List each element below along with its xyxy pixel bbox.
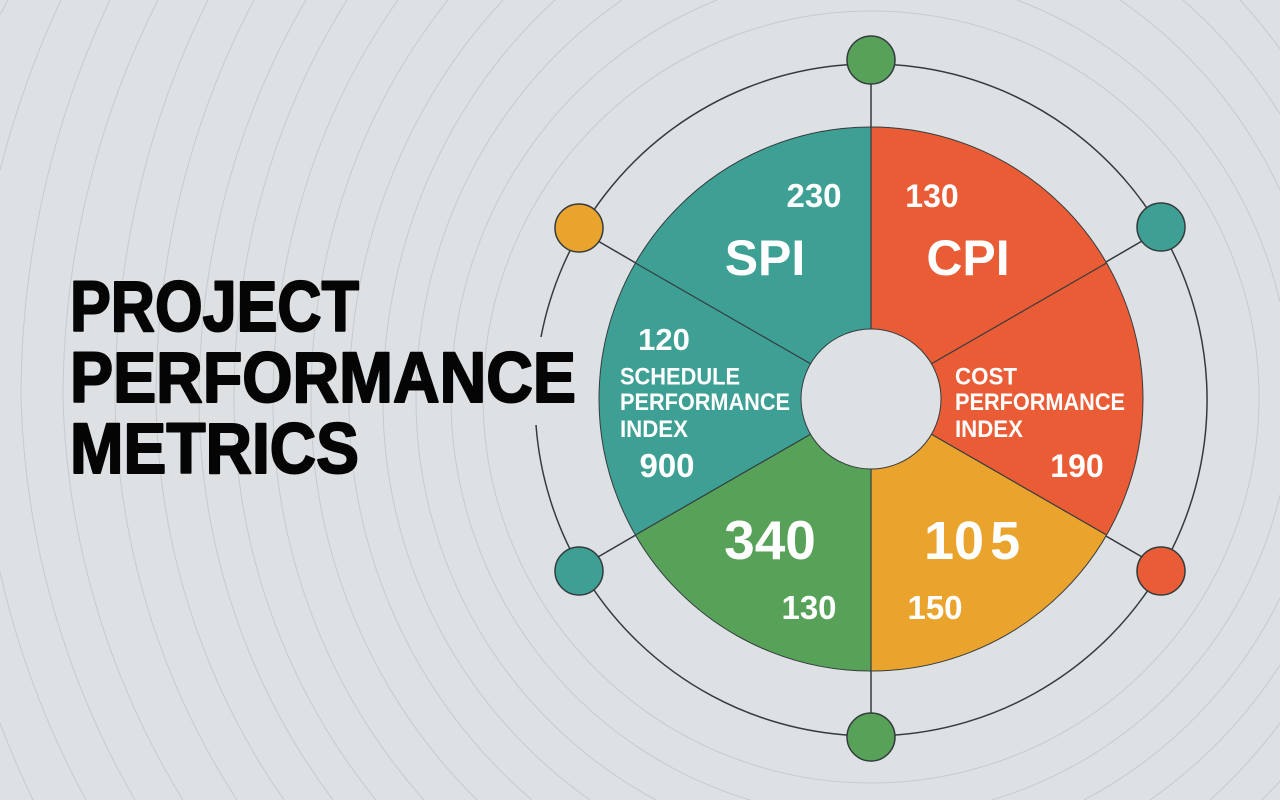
segment: SPI teal top: [635, 127, 871, 399]
node: teal upper right: [1137, 203, 1185, 251]
title: METRICS: [70, 410, 359, 489]
node: green bottom: [847, 713, 895, 761]
value: 900: 900: [639, 447, 695, 484]
label: cost performance index: [955, 364, 1125, 443]
value: 130 bottom: 130: [781, 589, 837, 626]
donut chart: [599, 127, 1143, 671]
node: teal lower left: [555, 547, 603, 595]
label: cost performance index: INDEX: [955, 416, 1023, 443]
segment: schedule performance index: [599, 263, 871, 535]
value: 190: 190: [1050, 448, 1104, 484]
segment: cost performance index: [871, 263, 1143, 535]
label: CPI: CPI: [926, 230, 1010, 286]
value: 130 top right: 130: [905, 178, 959, 214]
segment labels: [638, 177, 1104, 626]
pie outline: [599, 127, 1143, 671]
title: PERFORMANCE: [70, 339, 576, 418]
segment: green 340: [635, 399, 871, 671]
segment: CPI orange top: [871, 127, 1107, 399]
node: amber upper left: [555, 204, 603, 252]
label: schedule performance index: SCHEDULE: [620, 364, 740, 390]
node: orange lower right: [1137, 547, 1185, 595]
value: 105: 105: [924, 511, 1020, 571]
label: cost performance index: PERFORMANCE: [955, 389, 1125, 416]
value: 150: 150: [907, 589, 963, 626]
title: [70, 268, 576, 489]
outer ring with spokes: [536, 60, 1207, 738]
value: 230: 230: [786, 177, 842, 214]
label: SPI: SPI: [725, 230, 805, 286]
label: schedule performance index: [620, 364, 790, 443]
value: 340: 340: [724, 509, 816, 571]
segment: amber 105: [871, 399, 1107, 671]
node: green top: [847, 36, 895, 84]
label: cost performance index: COST: [955, 364, 1017, 390]
segment dividers: [635, 127, 1107, 671]
center hole: [801, 329, 941, 469]
label: schedule performance index: PERFORMANCE: [620, 389, 790, 416]
title: PROJECT: [70, 268, 359, 347]
label: schedule performance index: INDEX: [620, 416, 688, 443]
value: 120: 120: [638, 322, 690, 357]
